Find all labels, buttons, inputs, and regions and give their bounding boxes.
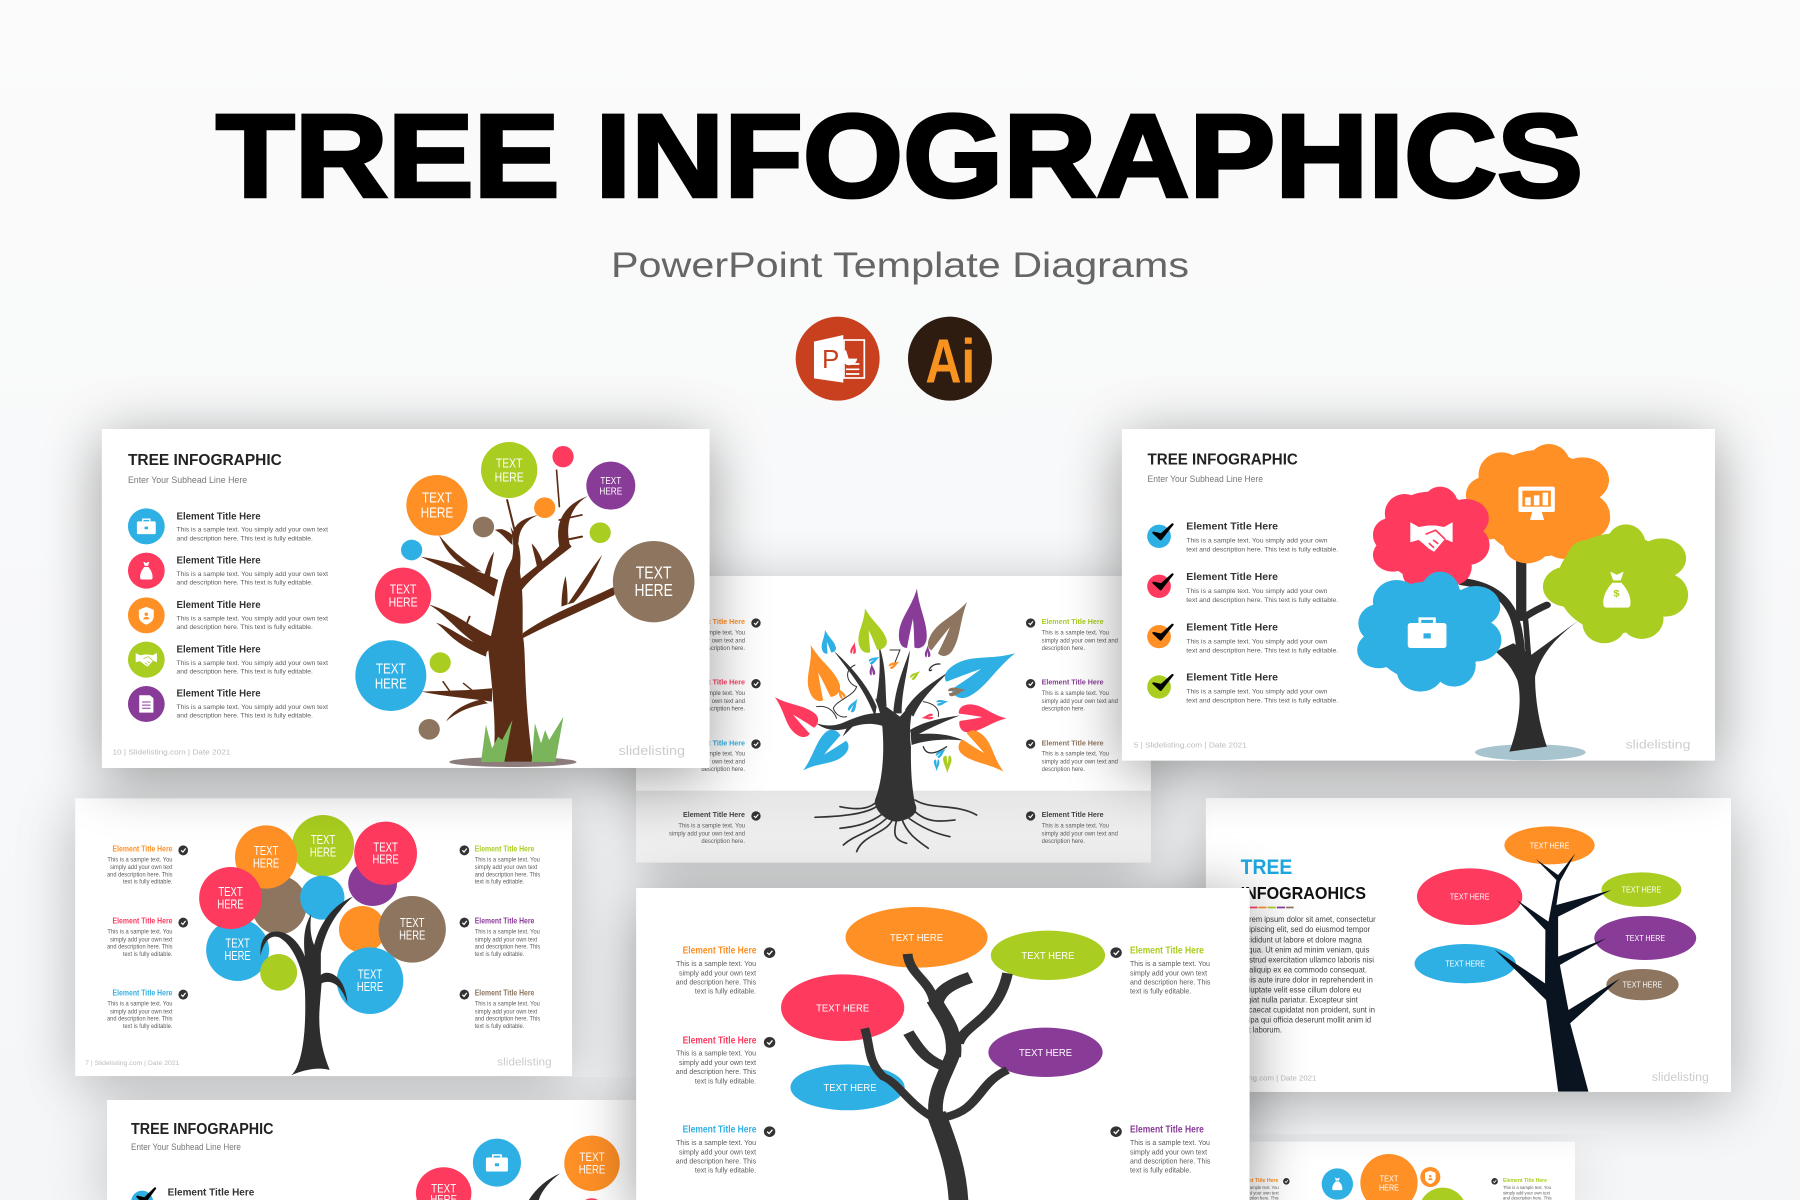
right text column: simply add your own text bbox=[1130, 1147, 1208, 1156]
right text column: Element Title Here bbox=[1042, 678, 1104, 687]
tree bbox=[815, 644, 977, 852]
panel: slide bottom right bbox=[1230, 1142, 1575, 1200]
paragraph: voluptate velit esse cillum dolore eu bbox=[1241, 985, 1361, 994]
right text column: This is a sample text. You bbox=[475, 1001, 540, 1008]
left text column bbox=[669, 617, 761, 845]
paragraph: incididunt ut labore et dolore magna bbox=[1241, 935, 1362, 944]
left text column: text is fully editable. bbox=[695, 986, 756, 995]
left text column bbox=[107, 844, 188, 1030]
left text column: This is a sample text. You bbox=[678, 824, 745, 830]
right text column bbox=[1110, 946, 1210, 1174]
left text column: simply add your own text and bbox=[669, 760, 745, 766]
left text column: text is fully editable. bbox=[123, 879, 173, 886]
blob: orange bbox=[1466, 444, 1610, 563]
left text column: Element Title Here bbox=[683, 678, 745, 687]
panel: slide branch tree bbox=[102, 429, 710, 768]
right element title: Element Title Here bbox=[1503, 1178, 1547, 1184]
panel: slide bottom left bbox=[107, 1100, 636, 1200]
right text column: simply add your own text and bbox=[1042, 638, 1118, 644]
left text column: description here. bbox=[701, 839, 745, 845]
left text column: text is fully editable. bbox=[123, 1023, 173, 1030]
ovals bbox=[1415, 826, 1696, 1000]
element list: and description here. This text is fully editable. bbox=[177, 625, 313, 631]
element list: This is a sample text. You simply add your own bbox=[1186, 689, 1328, 695]
right text column: Element Title Here bbox=[1042, 738, 1104, 747]
element list: This is a sample text. You simply add your own bbox=[1186, 538, 1328, 544]
bubbles: TEXT bbox=[496, 457, 522, 471]
bubbles: HERE bbox=[389, 596, 418, 610]
element title: Element Title Here bbox=[168, 1187, 254, 1198]
chart: circle canopy: HERE bbox=[253, 856, 279, 870]
bubbles: TEXT bbox=[376, 661, 406, 677]
right text column: This is a sample text. You bbox=[1042, 752, 1109, 758]
right text column: simply add your own text bbox=[475, 864, 537, 871]
left text column: and description here. This bbox=[676, 977, 756, 986]
bubble: money bag bbox=[1322, 1168, 1353, 1200]
left text column: simply add your own text bbox=[679, 1058, 757, 1067]
right text column: description here. bbox=[1042, 839, 1085, 845]
left text column: This is a sample text. You bbox=[678, 752, 745, 758]
element list: and description here. This text is fully editable. bbox=[177, 713, 313, 719]
bubbles bbox=[355, 442, 694, 740]
watermark: slidelisting bbox=[497, 1055, 552, 1068]
element list: and description here. This text is fully editable. bbox=[177, 669, 313, 675]
icon: money bag bbox=[1603, 572, 1631, 608]
panel: slide oval tree bbox=[636, 888, 1250, 1200]
element list: Element Title Here bbox=[1186, 572, 1278, 583]
panel: slide cloud tree bbox=[1122, 429, 1715, 761]
element list: This is a sample text. You simply add your own bbox=[1186, 639, 1328, 645]
subtitle: PowerPoint Template Diagrams bbox=[611, 246, 1189, 285]
chart: circle canopy: HERE bbox=[372, 852, 399, 866]
left text column: simply add your own text bbox=[110, 1009, 173, 1015]
left element text bbox=[1230, 1185, 1279, 1200]
element list: Element Title Here bbox=[177, 644, 261, 655]
left text column: text is fully editable. bbox=[695, 1165, 756, 1174]
oval labels: TEXT HERE bbox=[890, 933, 943, 944]
element list: This is a sample text. You simply add your own text bbox=[177, 527, 328, 533]
oval labels: TEXT HERE bbox=[1019, 1048, 1072, 1059]
element list bbox=[128, 508, 328, 722]
leaves bbox=[766, 587, 1023, 782]
left text column: simply add your own text bbox=[110, 864, 173, 871]
right text column: This is a sample text. You bbox=[1042, 824, 1109, 830]
element list: Element Title Here bbox=[1186, 622, 1278, 633]
left text column: This is a sample text. You bbox=[676, 1138, 756, 1147]
left element text: This is a sample text. You bbox=[1231, 1185, 1279, 1190]
bubbles: TEXT bbox=[636, 563, 672, 583]
left text column: text is fully editable. bbox=[695, 1076, 756, 1085]
right text column: This is a sample text. You bbox=[1130, 959, 1210, 968]
right element text: This is a sample text. You bbox=[1503, 1185, 1552, 1190]
chart: circle canopy: TEXT bbox=[254, 844, 278, 858]
icon: monitor bbox=[1518, 487, 1555, 520]
right text column: Element Title Here bbox=[1130, 1125, 1204, 1135]
paragraph: Duis aute irure dolor in reprehenderit in bbox=[1241, 975, 1373, 984]
ovals bbox=[781, 907, 1105, 1110]
element list: Element Title Here bbox=[1186, 672, 1278, 683]
bubbles: HERE bbox=[375, 676, 407, 692]
oval labels: TEXT HERE bbox=[1021, 951, 1075, 962]
left text column: simply add your own text bbox=[679, 1147, 757, 1156]
chart: circle canopy: HERE bbox=[357, 980, 383, 994]
bubble: orange text: TEXT bbox=[1380, 1173, 1399, 1183]
oval labels: TEXT HERE bbox=[1623, 980, 1663, 990]
ground shadow bbox=[449, 757, 577, 767]
icon: money bag: $ bbox=[1613, 589, 1620, 599]
check bullet bbox=[131, 1191, 153, 1200]
left text column: and description here. This bbox=[107, 872, 172, 878]
element list: Element Title Here bbox=[1186, 521, 1278, 532]
left text column: Element Title Here bbox=[113, 844, 173, 853]
right element text bbox=[1503, 1185, 1552, 1200]
left text column: description here. bbox=[701, 767, 745, 773]
chart: circle canopy: HERE bbox=[217, 897, 244, 911]
right text column: simply add your own text bbox=[1130, 968, 1208, 977]
paragraph: nostrud exercitation ullamco laboris nisi bbox=[1241, 955, 1374, 964]
icon: briefcase bbox=[1408, 619, 1446, 648]
left text column: and description here. This bbox=[107, 944, 172, 951]
right text column bbox=[1026, 617, 1118, 845]
slide subhead: Enter Your Subhead Line Here bbox=[128, 476, 247, 486]
panel: slide tree with text bbox=[1206, 798, 1731, 1092]
element list: and description here. This text is fully editable. bbox=[177, 580, 313, 586]
right text column: This is a sample text. You bbox=[1042, 630, 1109, 636]
icon: Illustrator bbox=[908, 317, 992, 401]
left text column: This is a sample text. You bbox=[107, 1001, 173, 1008]
right text column: This is a sample text. You bbox=[1042, 691, 1109, 697]
oval labels: TEXT HERE bbox=[1530, 840, 1570, 850]
element list: Element Title Here bbox=[177, 511, 261, 522]
slide heading: TREE INFOGRAPHIC bbox=[128, 451, 282, 469]
oval labels bbox=[816, 933, 1075, 1094]
slide heading: TREE INFOGRAPHIC bbox=[1148, 450, 1298, 468]
panel: slide circles tree bbox=[75, 798, 572, 1076]
watermark: slidelisting bbox=[1652, 1070, 1709, 1084]
bubble: orange text: TEXT bbox=[579, 1151, 605, 1164]
oval labels: TEXT HERE bbox=[1450, 892, 1490, 902]
tick bbox=[137, 1188, 155, 1200]
paragraph bbox=[1241, 915, 1376, 1035]
watermark: slidelisting bbox=[619, 743, 685, 758]
right text column: text is fully editable. bbox=[475, 879, 525, 886]
right text column: description here. bbox=[1042, 646, 1085, 652]
left text column: and description here. This bbox=[676, 1067, 756, 1076]
icon: check right bbox=[1491, 1178, 1498, 1185]
paragraph: fugiat nulla pariatur. Excepteur sint bbox=[1241, 995, 1358, 1004]
bubble: orange text: HERE bbox=[1379, 1183, 1399, 1193]
oval labels: TEXT HERE bbox=[1622, 885, 1662, 895]
left text column: and description here. This bbox=[107, 1016, 172, 1023]
footer: 5 | Slidelisting.com | Date 2021 bbox=[1134, 741, 1247, 749]
oval labels: TEXT HERE bbox=[1625, 933, 1665, 943]
grass bbox=[481, 717, 563, 762]
right text column: and description here. This bbox=[475, 944, 540, 951]
right text column: Element Title Here bbox=[475, 988, 534, 998]
right text column bbox=[460, 844, 540, 1030]
left text column: text is fully editable. bbox=[123, 951, 173, 958]
left text column: Element Title Here bbox=[683, 946, 757, 956]
right element text: simply add your own text bbox=[1503, 1190, 1551, 1195]
icon: check left bbox=[1283, 1178, 1290, 1185]
bubble: shield bbox=[1420, 1167, 1440, 1187]
bubble: red text: TEXT bbox=[431, 1182, 456, 1195]
element list: text and description here. This text is fully editable. bbox=[1186, 698, 1338, 704]
slide heading INFOGRAOHICS: INFOGRAOHICS bbox=[1241, 882, 1366, 903]
element list: text and description here. This text is fully editable. bbox=[1186, 547, 1338, 553]
chart: circle canopy: TEXT bbox=[358, 967, 382, 981]
chart: circle canopy: TEXT bbox=[218, 885, 243, 899]
right text column: description here. bbox=[1042, 767, 1085, 773]
paragraph: adipiscing elit, sed do eiusmod tempor bbox=[1241, 925, 1370, 934]
left text column: This is a sample text. You bbox=[676, 959, 756, 968]
chart: circle canopy: HERE bbox=[399, 928, 425, 942]
bubble: green bbox=[1419, 1188, 1467, 1200]
right text column: This is a sample text. You bbox=[475, 929, 540, 936]
tree trunk bbox=[260, 897, 353, 1075]
left text column: Element Title Here bbox=[683, 810, 745, 819]
tree branch bbox=[527, 1173, 560, 1200]
left text column: This is a sample text. You bbox=[107, 857, 173, 863]
footer: | Slidelisting.com | Date 2021 bbox=[1215, 1074, 1316, 1083]
right text column: This is a sample text. You bbox=[475, 857, 540, 863]
oval labels bbox=[1445, 840, 1665, 990]
chart: circle canopy: TEXT bbox=[400, 916, 424, 930]
paragraph: ut aliquip ex ea commodo consequat. bbox=[1241, 965, 1367, 974]
icon: briefcase bbox=[486, 1155, 508, 1172]
title: TREE INFOGRAPHICS bbox=[216, 90, 1583, 222]
right text column: Element Title Here bbox=[475, 916, 534, 926]
right text column: Element Title Here bbox=[1042, 810, 1104, 819]
element list: This is a sample text. You simply add your own bbox=[1186, 588, 1328, 595]
chart: circle canopy: TEXT bbox=[373, 840, 398, 854]
left text column bbox=[676, 946, 775, 1174]
paragraph: occaecat cupidatat non proident, sunt in bbox=[1241, 1005, 1375, 1014]
right text column: text is fully editable. bbox=[1130, 986, 1191, 995]
right text column: Element Title Here bbox=[475, 844, 534, 853]
element list: This is a sample text. You simply add your own text bbox=[177, 572, 328, 578]
left text column: simply add your own text and bbox=[669, 831, 745, 837]
element list: This is a sample text. You simply add your own text bbox=[177, 661, 328, 667]
right text column: text is fully editable. bbox=[1130, 1165, 1191, 1174]
left text column: Element Title Here bbox=[683, 1035, 757, 1046]
right text column: simply add your own text and bbox=[1042, 699, 1118, 705]
left text column: This is a sample text. You bbox=[107, 929, 173, 936]
chart: circle canopy: TEXT bbox=[311, 833, 335, 847]
element list: Element Title Here bbox=[177, 689, 261, 699]
bubbles: TEXT bbox=[390, 583, 416, 597]
left text column: description here. bbox=[701, 646, 745, 652]
element list: text and description here. This text is fully editable. bbox=[1186, 597, 1338, 604]
ground shadow bbox=[1475, 744, 1586, 760]
bubbles: TEXT bbox=[422, 490, 452, 506]
blob: red bbox=[1373, 487, 1490, 590]
left element text: simply add your own text bbox=[1232, 1190, 1279, 1195]
right text column: and description here. This bbox=[1130, 1156, 1210, 1165]
watermark: slidelisting bbox=[1626, 737, 1690, 751]
left text column: Element Title Here bbox=[683, 738, 745, 747]
left text column: Element Title Here bbox=[683, 617, 745, 626]
right text column: text is fully editable. bbox=[475, 1023, 525, 1030]
element list: and description here. This text is fully editable. bbox=[177, 536, 313, 542]
panel: slide leaf tree bbox=[636, 576, 1151, 863]
left text column: This is a sample text. You bbox=[678, 691, 745, 697]
paragraph: Lorem ipsum dolor sit amet, consectetur bbox=[1241, 915, 1376, 924]
left text column: Element Title Here bbox=[113, 916, 173, 926]
bubble: red small bbox=[579, 1198, 605, 1200]
right text column: and description here. This bbox=[475, 1016, 540, 1023]
icon: handshake bbox=[1410, 522, 1453, 552]
chart: circle canopy: TEXT bbox=[225, 936, 250, 950]
left text column: simply add your own text bbox=[679, 968, 757, 977]
slide subhead: Enter Your Subhead Line Here bbox=[131, 1142, 241, 1153]
right text column: Element Title Here bbox=[1042, 617, 1104, 626]
left text column: and description here. This bbox=[676, 1156, 756, 1165]
bubbles: HERE bbox=[634, 581, 673, 600]
left text column: description here. bbox=[701, 707, 745, 713]
bubbles: HERE bbox=[421, 505, 453, 521]
bubble: red text bbox=[416, 1167, 471, 1200]
paragraph: est laborum. bbox=[1241, 1026, 1282, 1035]
element list: This is a sample text. You simply add your own text bbox=[177, 616, 328, 622]
icon: PowerPoint: P bbox=[822, 344, 839, 374]
colour bar bbox=[1241, 907, 1294, 908]
footer: 7 | Slidelisting.com | Date 2021 bbox=[85, 1060, 180, 1067]
paragraph: culpa qui officia deserunt mollit anim id bbox=[1241, 1016, 1371, 1025]
blob: green bbox=[1543, 524, 1688, 643]
icon: shield bbox=[1425, 1171, 1436, 1184]
right text column: and description here. This bbox=[475, 872, 540, 878]
footer: 10 | Slidelisting.com | Date 2021 bbox=[112, 748, 230, 756]
left text column: simply add your own text and bbox=[669, 699, 745, 705]
tree bbox=[865, 954, 1008, 1200]
left text column: Element Title Here bbox=[113, 988, 173, 998]
right text column: text is fully editable. bbox=[475, 951, 525, 958]
chart: circle canopy bbox=[199, 815, 446, 1014]
element list: Element Title Here bbox=[177, 600, 261, 611]
tree bbox=[1462, 560, 1581, 752]
right text column: This is a sample text. You bbox=[1130, 1138, 1210, 1147]
icon: Illustrator: Ai bbox=[925, 328, 975, 397]
bubble: orange text bbox=[1360, 1154, 1418, 1200]
right text column: simply add your own text bbox=[475, 937, 537, 943]
right text column: simply add your own text bbox=[475, 1009, 537, 1015]
left text column: This is a sample text. You bbox=[676, 1048, 756, 1057]
right text column: and description here. This bbox=[1130, 977, 1210, 986]
right text column: description here. bbox=[1042, 707, 1085, 713]
chart: circle canopy: HERE bbox=[310, 845, 336, 859]
element list bbox=[1147, 521, 1338, 704]
right text column: Element Title Here bbox=[1130, 946, 1204, 956]
chart: circle canopy: HERE bbox=[224, 949, 251, 963]
bubble: orange text: HERE bbox=[579, 1163, 605, 1176]
slide heading TREE: TREE bbox=[1241, 854, 1292, 879]
left text column: Element Title Here bbox=[683, 1125, 757, 1135]
left text column: simply add your own text bbox=[110, 937, 173, 943]
tree bbox=[421, 470, 614, 762]
right text column: simply add your own text and bbox=[1042, 831, 1118, 837]
oval labels: TEXT HERE bbox=[1445, 959, 1485, 969]
bubbles: HERE bbox=[599, 486, 622, 497]
oval labels: TEXT HERE bbox=[816, 1003, 869, 1014]
icon: PowerPoint bbox=[796, 317, 880, 401]
slide subhead: Enter Your Subhead Line Here bbox=[1148, 475, 1263, 485]
bubble: orange text bbox=[564, 1136, 620, 1191]
slide heading: TREE INFOGRAPHIC bbox=[131, 1120, 273, 1138]
bubbles: TEXT bbox=[600, 476, 621, 487]
right text column: simply add your own text and bbox=[1042, 760, 1118, 766]
left text column: This is a sample text. You bbox=[678, 630, 745, 636]
element list: This is a sample text. You simply add your own text bbox=[177, 704, 328, 711]
bubbles: HERE bbox=[495, 471, 524, 485]
bubble: briefcase bbox=[473, 1139, 521, 1187]
tree bbox=[1494, 853, 1620, 1092]
oval labels: TEXT HERE bbox=[823, 1083, 877, 1094]
element list: text and description here. This text is fully editable. bbox=[1186, 648, 1338, 654]
paragraph: aliqua. Ut enim ad minim veniam, quis bbox=[1241, 945, 1369, 954]
icon: bag bbox=[1332, 1178, 1342, 1190]
element list: Element Title Here bbox=[177, 556, 261, 566]
blob: blue bbox=[1357, 572, 1501, 692]
left text column: simply add your own text and bbox=[669, 638, 745, 644]
left element title: Element Title Here bbox=[1233, 1178, 1278, 1184]
